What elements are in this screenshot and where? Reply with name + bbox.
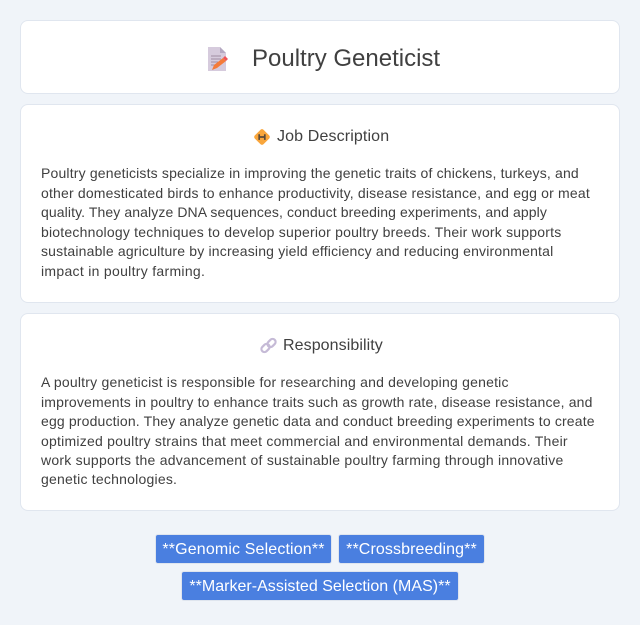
text block: job description: biotechnology techniques to develop superior poultry breeds. Their work supports: [41, 224, 561, 240]
title: Poultry Geneticist: [252, 45, 440, 72]
text block: responsibility: genetic technologies.: [41, 471, 177, 487]
text block: job description: quality. They analyze DNA sequences, conduct breeding experiments, and apply: [41, 204, 547, 220]
panel: title card: [20, 20, 620, 94]
heading: job description: Job Description: [277, 128, 389, 145]
heading: responsibility: Responsibility: [283, 337, 383, 354]
text block: responsibility: optimized poultry strains that meet commercial and environmental demands. Their: [41, 433, 568, 449]
panel: job description: [20, 104, 620, 303]
button: genomic selection: **Genomic Selection**: [162, 541, 325, 558]
button: genomic selection: [155, 534, 332, 564]
text block: responsibility: improvements in poultry to enhance traits such as growth rate, disease resistance, and: [41, 394, 593, 410]
text block: responsibility: [41, 374, 595, 487]
button: marker-assisted selection: [181, 571, 459, 601]
panel: responsibility: [20, 313, 620, 511]
text block: job description: [41, 165, 590, 279]
button: crossbreeding: **Crossbreeding**: [346, 541, 477, 558]
text block: responsibility: egg production. They analyze genetic data and conduct breeding experiments to create: [41, 413, 595, 429]
icon: construction diamond: [254, 129, 270, 145]
icon: link: [260, 338, 277, 354]
text block: job description: impact in poultry farming.: [41, 263, 205, 279]
button: crossbreeding: [338, 534, 485, 564]
text block: job description: sustainable agriculture by increasing yield efficiency and reducing environmental: [41, 243, 553, 259]
icon: memo with pencil: [208, 47, 228, 71]
text block: responsibility: A poultry geneticist is responsible for researching and developing genetic: [41, 374, 509, 390]
text block: job description: Poultry geneticists specialize in improving the genetic traits of chickens, turkeys, and: [41, 165, 579, 181]
text block: responsibility: work supports the advancement of sustainable poultry farming through innovative: [41, 452, 563, 468]
button: marker-assisted selection: **Marker-Assisted Selection (MAS)**: [189, 578, 451, 595]
text block: job description: other domesticated birds to enhance productivity, disease resistance, and egg or meat: [41, 185, 590, 201]
